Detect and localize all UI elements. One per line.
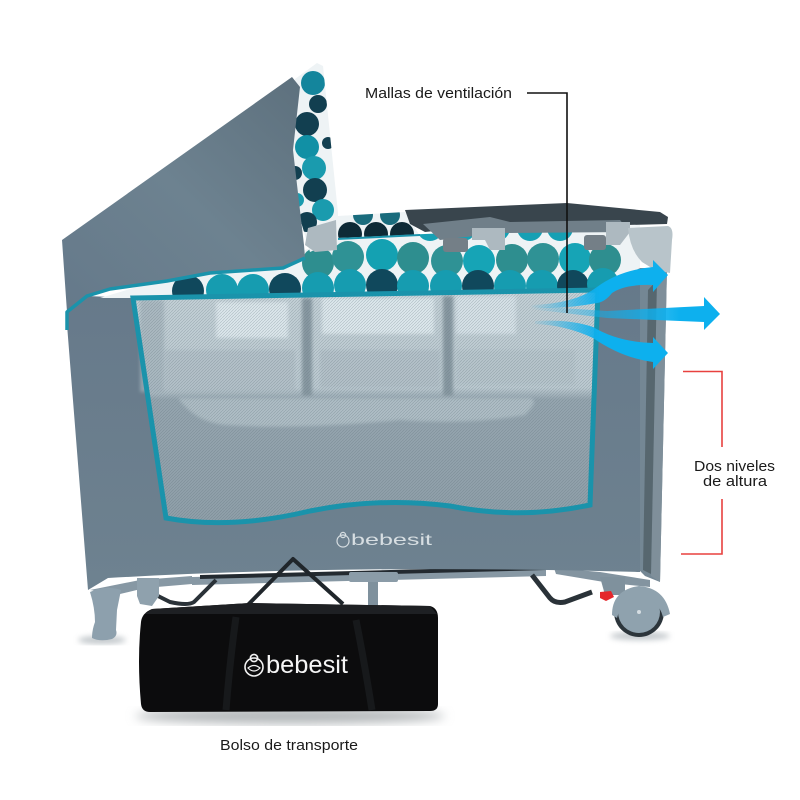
hood hinge [305,220,337,252]
bag logo: bebesit [266,651,348,679]
mesh teal border [133,290,598,523]
main body fabric panel [66,280,640,590]
label: dos niveles de altura: de altura [703,473,768,490]
crib logo: bebesit [351,532,433,549]
arrow: middle [530,297,720,330]
label: dos niveles de altura: Dos niveles [694,458,775,475]
bag shadow [135,708,445,724]
ground shadows [78,632,670,644]
callout line: mallas de ventilación [527,93,567,313]
arrow: top [530,260,668,308]
label: bolso de transporte: Bolso de transporte [220,737,358,754]
polka dots upper row [302,239,621,279]
red lever [600,591,614,601]
folded canopy hood [62,77,305,312]
crib product illustration [62,60,672,644]
label: mallas de ventilación: Mallas de ventilación [365,85,512,102]
crib undercarriage frame [90,566,670,640]
crib logo [337,532,433,549]
left leg [90,588,121,640]
bag handles [236,559,343,617]
arrow: bottom [535,321,668,369]
ventilation airflow arrows [530,260,720,369]
bag body [139,603,438,712]
mesh window [133,290,598,523]
polka dots lower row [172,268,617,295]
height bracket: top [683,372,722,447]
height bracket: bottom [681,499,722,554]
right wheel [612,586,670,637]
hood dotted inner lining [293,63,338,252]
transport bag [135,559,445,724]
bassinet top rim [337,203,668,252]
corner plastic joint [628,226,672,273]
knuckle [137,578,159,606]
dotted band behind the top rail [100,225,640,298]
right outer side panel [590,268,667,582]
polka dots top row [420,232,572,241]
mesh see-through details [140,296,575,427]
far-side rail strip with dots [338,212,418,238]
canopy teal trim [67,258,305,330]
